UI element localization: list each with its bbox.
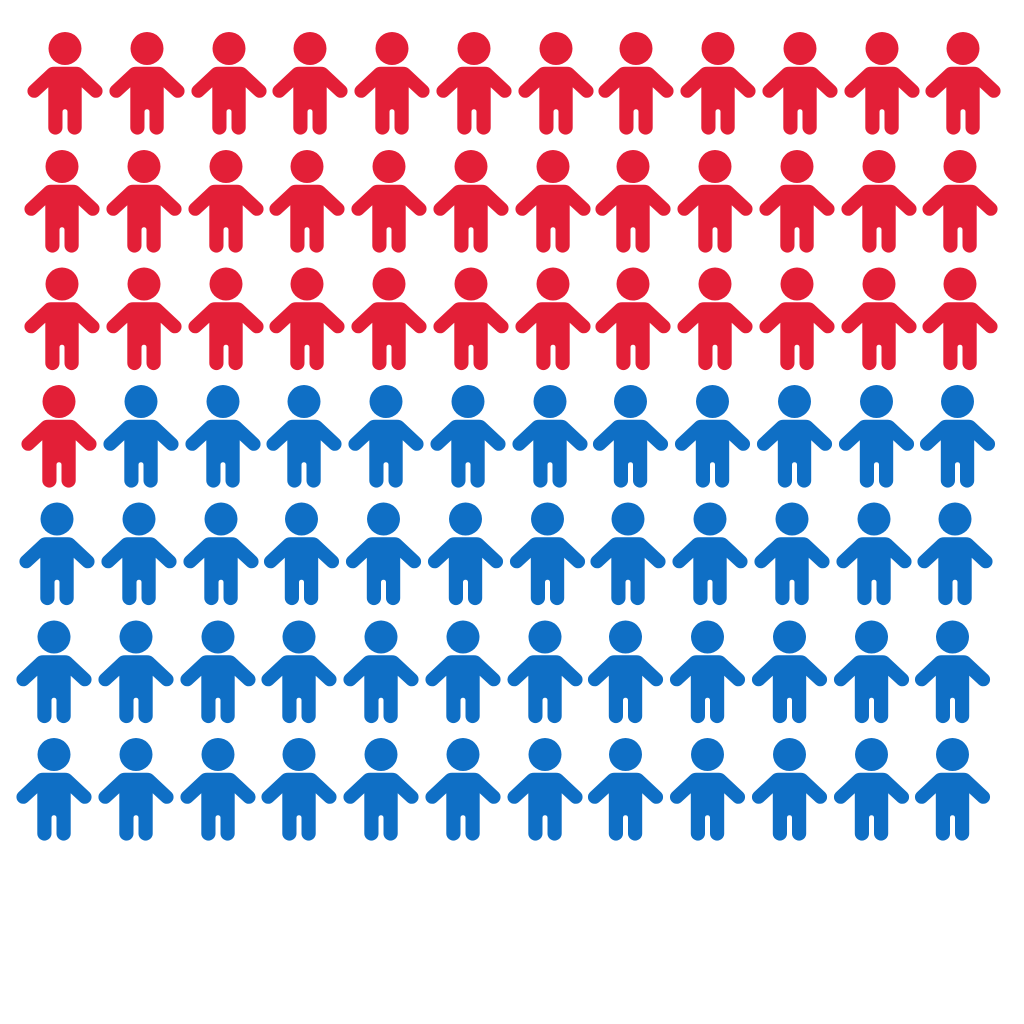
person 65 [343, 620, 419, 723]
row 6 [16, 620, 990, 723]
person 69 [670, 620, 745, 723]
person 56 [590, 502, 666, 605]
person 77 [343, 738, 419, 841]
person 11 [844, 32, 920, 135]
person 20 [595, 150, 671, 253]
person 2 [109, 32, 185, 135]
row 1 [27, 32, 1001, 135]
person 61 [16, 620, 92, 723]
person 45 [675, 385, 750, 488]
person 23 [841, 150, 917, 253]
person 8 [598, 32, 674, 135]
row 5 [19, 502, 993, 605]
person 53 [346, 502, 421, 605]
person 47 [839, 385, 914, 488]
person 28 [269, 268, 345, 370]
person 74 [98, 738, 174, 841]
person 33 [677, 268, 753, 370]
person 35 [841, 268, 917, 370]
person 63 [180, 620, 256, 723]
person 10 [762, 32, 838, 135]
person 48 [920, 385, 995, 488]
person 68 [588, 620, 663, 723]
person 58 [754, 502, 830, 605]
person 5 [354, 32, 430, 135]
person 6 [436, 32, 512, 135]
person 42 [430, 385, 506, 488]
person 4 [272, 32, 348, 135]
person 55 [510, 502, 585, 605]
person 50 [101, 502, 177, 605]
person 26 [106, 268, 182, 370]
person 80 [588, 738, 663, 841]
person 24 [922, 150, 998, 253]
row 7 [16, 738, 990, 841]
person 71 [834, 620, 909, 723]
person 30 [433, 268, 509, 370]
person 66 [425, 620, 501, 723]
person 78 [425, 738, 501, 841]
person 76 [261, 738, 337, 841]
person 40 [266, 385, 342, 488]
person 43 [512, 385, 588, 488]
person 82 [752, 738, 827, 841]
person 15 [188, 150, 264, 253]
person 79 [507, 738, 583, 841]
person 57 [672, 502, 748, 605]
person 9 [680, 32, 756, 135]
person 38 [103, 385, 179, 488]
person 75 [180, 738, 256, 841]
person 25 [24, 268, 100, 370]
row 2 [24, 150, 998, 253]
person 41 [348, 385, 424, 488]
person 29 [351, 268, 427, 370]
person 49 [19, 502, 95, 605]
person 14 [106, 150, 182, 253]
person 22 [759, 150, 835, 253]
person 32 [595, 268, 671, 370]
person 12 [925, 32, 1001, 135]
person 37 (red) [21, 385, 97, 488]
person 17 [351, 150, 427, 253]
row 3 [24, 268, 998, 370]
person 1 [27, 32, 103, 135]
person 36 [922, 268, 998, 370]
person 70 [752, 620, 827, 723]
person 73 [16, 738, 92, 841]
person 16 [269, 150, 345, 253]
person 60 [917, 502, 993, 605]
person 3 [191, 32, 267, 135]
person 34 [759, 268, 835, 370]
person 31 [515, 268, 591, 370]
person 13 [24, 150, 100, 253]
person 67 [507, 620, 583, 723]
person 19 [515, 150, 591, 253]
person 54 [428, 502, 503, 605]
person 64 [261, 620, 337, 723]
person 51 [183, 502, 259, 605]
person 44 [593, 385, 668, 488]
person 52 [264, 502, 339, 605]
person 21 [677, 150, 753, 253]
person 27 [188, 268, 264, 370]
person 62 [98, 620, 174, 723]
person 39 [185, 385, 261, 488]
person 83 [834, 738, 909, 841]
person 18 [433, 150, 509, 253]
person 81 [670, 738, 745, 841]
person 72 [915, 620, 990, 723]
person 46 [757, 385, 832, 488]
person 59 [836, 502, 912, 605]
person 84 [915, 738, 990, 841]
row 4 [21, 385, 995, 488]
person 7 [518, 32, 594, 135]
